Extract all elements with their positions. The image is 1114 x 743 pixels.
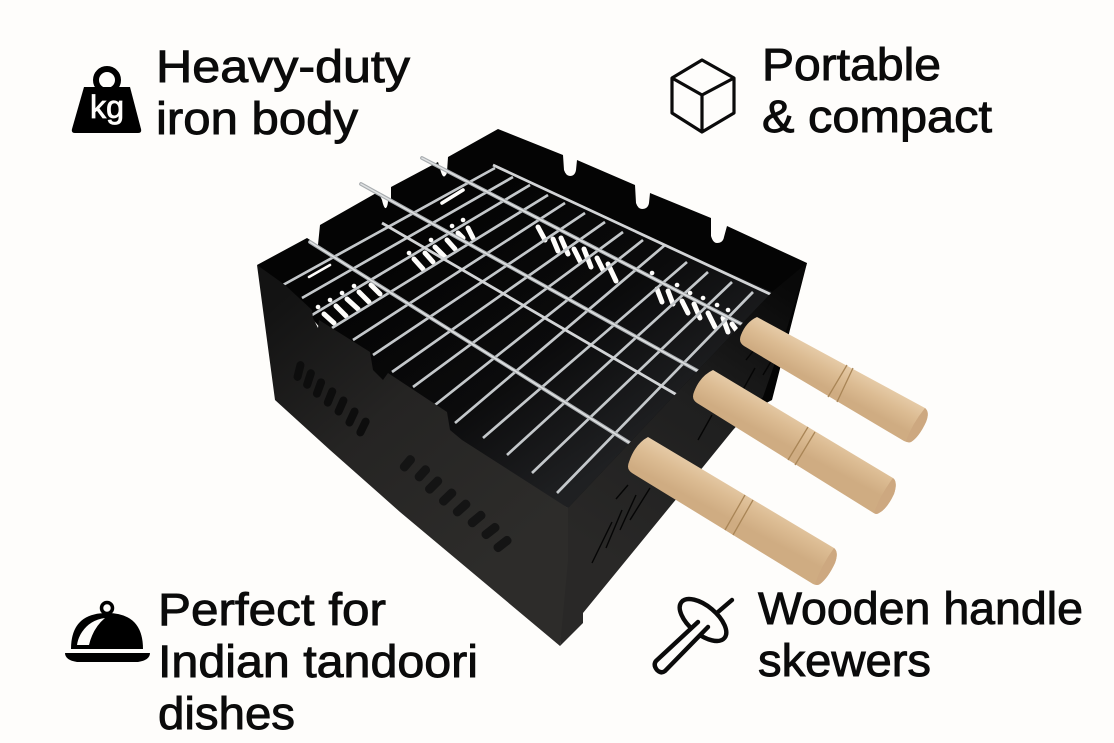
- wire grid long wires: [382, 165, 772, 395]
- icon: cube: [672, 60, 734, 132]
- heading: heavy-duty iron body: iron body: [156, 93, 359, 144]
- wire grid cross wires: [283, 168, 753, 493]
- heading: portable and compact: Portable: [762, 39, 941, 90]
- wooden handle 3: [628, 437, 837, 585]
- wooden handle 2: [693, 370, 896, 514]
- icon: kg weight: kg: [90, 89, 124, 125]
- icon: skewer handle: [655, 591, 733, 672]
- heading: perfect for indian tandoori dishes: Indian tandoori: [158, 636, 478, 687]
- icon: serving cloche: [65, 602, 150, 662]
- back walls with notches: [257, 129, 807, 508]
- heading: wooden handle skewers: skewers: [758, 635, 931, 686]
- heading: heavy-duty iron body: Heavy-duty: [156, 41, 411, 92]
- heading: perfect for indian tandoori dishes: [158, 584, 478, 739]
- right side wall: [560, 263, 807, 646]
- right vent row: [398, 454, 513, 554]
- right wall vent slits: [592, 345, 775, 563]
- icon: kg weight: [72, 69, 141, 133]
- left vent row: [293, 360, 371, 438]
- heading: portable and compact: & compact: [762, 91, 993, 142]
- heading: perfect for indian tandoori dishes: Perfect for: [158, 584, 386, 635]
- interior floor: [283, 168, 772, 508]
- white vent slots seen through the floor: [309, 190, 737, 332]
- skewer rods: [310, 158, 747, 445]
- heading: wooden handle skewers: [758, 583, 1083, 686]
- wooden handle 1: [740, 317, 928, 442]
- heading: portable and compact: [762, 39, 993, 142]
- front left wall: [257, 265, 568, 646]
- heading: perfect for indian tandoori dishes: dishes: [158, 688, 295, 739]
- heading: wooden handle skewers: Wooden handle: [758, 583, 1083, 634]
- heading: heavy-duty iron body: [156, 41, 411, 144]
- product: tandoori grill box: [257, 129, 928, 646]
